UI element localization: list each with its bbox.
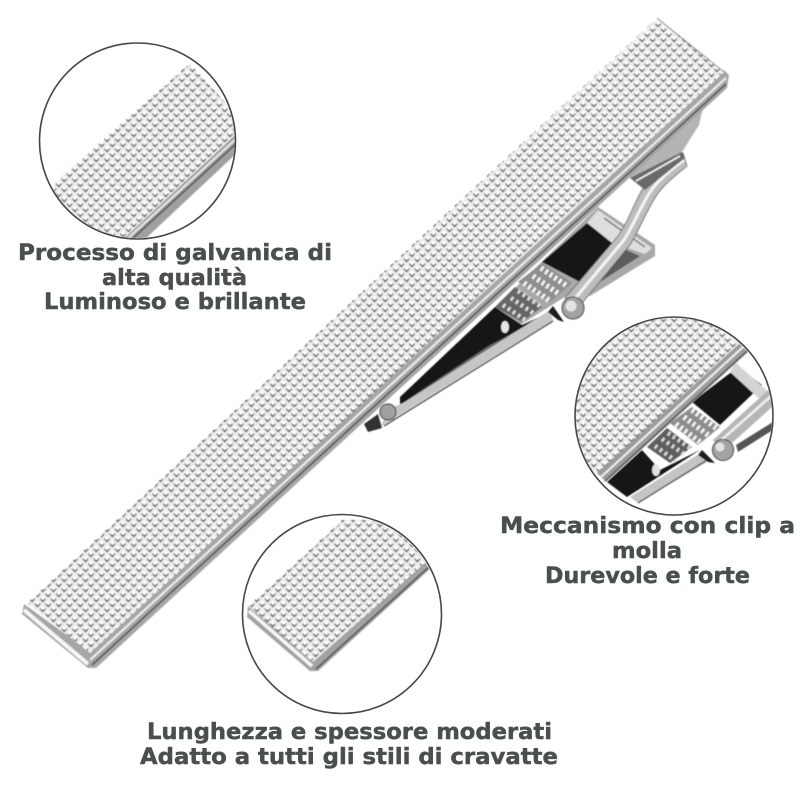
pivot pin <box>548 297 584 322</box>
bar end magnified view <box>247 519 432 671</box>
bar edge strip <box>22 70 729 668</box>
caption: spring clip: molla <box>612 539 682 564</box>
caption: spring clip: Meccanismo con clip a <box>500 514 795 539</box>
callout: spring clip detail <box>574 316 774 516</box>
lower silver strip <box>630 452 707 503</box>
clip mechanism behind the bar <box>364 108 703 432</box>
spring magnified view <box>576 318 772 504</box>
lower silver strip <box>380 310 553 427</box>
plating circle outline <box>40 43 236 239</box>
lower clip opening <box>400 307 550 405</box>
spring arm <box>565 153 687 308</box>
caption: plating <box>18 241 332 315</box>
bar end circle outline <box>242 514 442 714</box>
callout: plating detail <box>40 43 245 242</box>
caption: length and thickness: Lunghezza e spessore moderati <box>147 720 552 745</box>
rear hinge <box>364 404 396 432</box>
caption: plating: Processo di galvanica di <box>18 241 332 266</box>
spring coil <box>495 263 572 333</box>
spring circle outline <box>575 317 773 515</box>
knurled bar face <box>27 18 724 653</box>
caption: plating: Luminoso e brillante <box>44 290 306 315</box>
plating magnified view <box>54 64 234 238</box>
callout: bar thickness detail <box>242 514 442 714</box>
top hinge plate <box>628 108 703 180</box>
upper clip opening <box>542 223 612 282</box>
tie clip product <box>22 17 729 668</box>
caption: plating: alta qualità <box>102 266 247 291</box>
caption: length and thickness: Adatto a tutti gli stili di cravatte <box>140 745 558 770</box>
caption: spring clip: Durevole e forte <box>545 564 750 589</box>
caption: spring clip <box>500 514 795 589</box>
caption: length and thickness <box>140 720 558 770</box>
